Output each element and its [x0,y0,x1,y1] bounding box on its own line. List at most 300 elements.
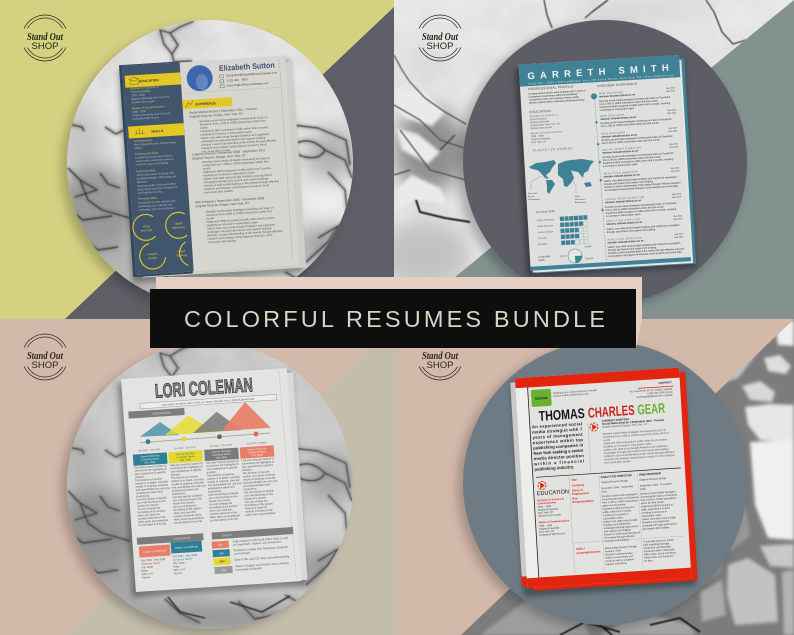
resume: Garreth Smith: Gather user data using Google Analytics and implement campaigns [608,242,681,249]
analytics director column: Excellent communication [605,552,634,557]
resume: Garreth Smith: ORIGINAL RESUME DESIGN, NY, NY [602,150,639,155]
resume: Elizabeth Sutton [118,55,307,283]
column text: results of ongoing, concrete [207,478,240,484]
sidebar: Brand [177,249,186,253]
analytics director column: ANALYTICS DIRECTOR [601,473,632,479]
resume: Garreth Smith: from 1,000 to 10000 subscribers within the first month. [599,99,658,106]
web designer column: WEB DESIGNER [639,471,661,477]
back sheet [127,373,307,591]
resume: Garreth Smith: ORIGINAL RESUME DESIGN, NY, NY [605,199,642,204]
logo: Stand Out Shop: Stand Out [422,350,459,362]
resume: Elizabeth Sutton: resulting an increase in subscription sales. [200,130,253,137]
resume: Elizabeth Sutton: Achieve a solid understanding of the market through effective [207,229,283,237]
resume: Garreth Smith: ORIGINAL RESUME DESIGN, NY, NY [601,134,638,139]
contact details: ElizabethS@OriginalResumeDesign.com [226,70,278,78]
column text: professional talent and [208,485,235,490]
current position text: CURRENT POSITION: [602,417,630,423]
tagline: position within publishing house. [553,393,589,398]
column text: Use your resume content to [170,461,203,467]
experience text: Original Resume Design, New York, NY [192,153,246,161]
resume: Garreth Smith: and analysis using keyword research, trend analysis and social data. [608,251,683,258]
experience entries: SOCIAL MEDIA DIRECTOR [602,146,642,152]
education text: New York, NY [538,511,554,515]
web designer column: CS5 including InDesign, [643,542,670,547]
job titles: Company Name [212,453,231,457]
analytics director column: Web Design Resume Design [605,545,638,550]
analytics director column: and organic link building. [604,529,632,533]
analytics director column: skills in social media and [605,555,634,560]
resume: Garreth Smith: ORIGINAL RESUME DESIGN, NY, NY [599,93,636,99]
photo [186,64,213,92]
logo: Stand Out Shop [24,334,66,380]
sidebar: Original University, New York, NY [132,111,171,117]
column text: when you need the [245,505,268,510]
job titles: Current Title Role [176,452,196,456]
education heading: EDUCATION [537,489,569,497]
resume: Garreth Smith: in increase in subscription sales. [603,163,639,168]
experience entries: WEB DESIGNER [600,114,624,118]
resume: Elizabeth Sutton: Gather user data using Google Analytics and organized [201,132,269,140]
column text: results of a certain. [244,495,267,501]
job titles: Company Name [141,457,160,462]
resume: Elizabeth Sutton: research and analysis using keyword research, trend [207,233,273,241]
column text: number and level of the [210,510,238,516]
column text: Use your resume content to [206,459,239,465]
row labels: Company [571,483,585,488]
resume: Elizabeth Sutton: month. [203,166,212,171]
left column text: An experienced social media strategist with 7 years of [528,89,586,96]
resume: Elizabeth Sutton: Gather user data using Google Analytics and organized [203,173,272,181]
sidebar: and CSS [141,228,153,233]
current position text: and social data studies. [604,459,632,465]
row labels: Dates of [572,488,583,493]
sidebar: Suite, Excel and Word, PowerPoint [137,185,178,191]
skills bar [212,527,293,539]
education text: Major [141,568,148,573]
column text: The function of resume [242,469,270,475]
resume: Garreth Smith: Mar 2017 [668,129,678,133]
web designer column: Gather user data using Google [642,516,677,521]
column text: experience. [172,491,186,496]
marble rocks [480,320,794,635]
language labels: English [585,246,593,248]
column text: The function of resume [207,472,235,478]
analytics director column: email as well as customer [606,558,634,563]
row labels: Responsibilities [572,499,594,504]
column text: professional talent and [136,489,163,495]
resume badge: RESUME [535,396,548,401]
left rule [516,388,538,578]
resume: Garreth Smith: Develop social media strategies increasing fan base on Facebook [605,202,677,209]
date labels: Jan 2002 - Jun 2008 [138,448,161,453]
column text: Use your resume content to [134,463,167,470]
column text: when you need the [173,510,196,515]
column text: The function of resume [171,474,199,480]
resume: Garreth Smith: ORIGINAL RESUME DESIGN, NY, NY [604,173,641,179]
analytics director column: subscription sales. [603,516,624,521]
resume: Garreth Smith: Sep 2014 [672,193,682,196]
education text: Bachelor of Science in [537,498,565,502]
contact box: 1234 SAINT, SUITE 09, NEW YORK, NY 10018 / 800 555 1234 / LORICOLEMAN.COM [161,398,254,407]
skill labels: Adobe Photoshop [537,218,555,222]
resume: Garreth Smith: Student Club Leader [530,126,553,130]
education text: New York, NY [539,530,555,534]
column text: skills, team accomplished [138,518,169,524]
column text: Use this section to details [172,493,203,499]
education text: 2003 - 2008 [538,505,552,509]
sidebar: Digital [174,221,183,226]
column text: You can change the [209,501,233,506]
sidebar: Strategy [176,253,188,257]
skill text: and InDesign [234,551,250,556]
education text: GPA: 3.47 [173,567,186,572]
column text: You can change the [244,498,268,504]
timeline [594,96,606,260]
back sheets [129,62,306,278]
analytics director column: from 1,000 to 10000 subscribers [602,499,639,505]
summary: An experienced social [532,421,582,429]
name: THOMAS [538,405,585,424]
skill labels: MS Office [538,244,549,246]
resume: Elizabeth Sutton: campaigns through paid search and organic building [207,226,272,234]
resume: Garreth Smith: from 1,000 to 10000 subscribers within the first month. [602,138,661,145]
web designer column: Photoshop and Illustrator [643,545,671,550]
contact block [629,380,674,399]
education text: Dec 2004 - Dec 2008 [172,553,198,558]
education text: 2008 - 2009 [539,524,553,528]
summary: experience within top [533,437,583,445]
resume: Elizabeth Sutton: Implement SEM increased in traffic within first 6 months [203,166,272,174]
resume: Garreth Smith: 2003 - 2008 [531,134,544,138]
name: Elizabeth Sutton [219,61,275,73]
resume: Elizabeth Sutton: Implement SEM increased in traffic within first 6 months [206,216,275,224]
column text: summarize the highlights of [206,462,239,468]
sidebar: Excellent communication skills in [135,153,173,160]
column text: summarize the highlights of [170,464,203,470]
resume: Lori Coleman [117,368,308,597]
column text: experience. [243,486,258,491]
light marble lumps [396,92,446,206]
sidebar: (2012) [134,146,142,150]
circle shadow [457,23,743,309]
column text: You can change the [137,506,161,511]
column text: your experience in specific [135,470,166,476]
analytics director column: Gather user data using Google [603,518,638,524]
logo: Stand Out Shop [419,15,461,61]
back sheets [521,372,698,591]
document shadow [118,60,304,283]
name: CHARLES [587,402,635,421]
sidebar [122,62,194,275]
name [538,400,665,424]
circle shadow [457,344,743,630]
column text: when you need the [209,507,232,513]
panel: pink marble quadrant [0,319,398,635]
banner black box [150,289,636,348]
left column text: management experience within top publishing [529,93,578,99]
resume: Garreth Smith: through paid search and organic link building. [607,228,656,234]
column text: skills, team accomplished [210,513,240,519]
column text: position. [171,472,181,477]
resume: Garreth Smith: Sep 2014 [669,143,679,146]
column text: formatting of the section [209,504,238,510]
column text: your role focusing on the [137,499,166,505]
date labels: Jan 2012 - Dec 2015 [210,443,233,448]
column text: and quantifiable you use your [208,481,242,487]
resume: Elizabeth Sutton: month. [206,216,215,220]
resume: Elizabeth Sutton: Facebook from 1,000 to 10000 subscribers within first [200,119,266,127]
grey diagonal band [65,7,394,319]
experience text: Web Designer | September 2006 - November 2008 [195,196,265,204]
analytics director column [601,473,643,566]
language labels: Language [538,254,551,259]
sidebar: Bachelor of Science in [130,85,160,90]
skill text: Fluent in English and Russian with a working [235,561,289,568]
current position text: Achieve a solid understanding of the market through effective [604,450,675,458]
resume: Garreth Smith: Sep 2014 [667,109,677,112]
resume: Elizabeth Sutton: research and analysis using keyword research, trend [201,142,267,150]
title banner [150,277,642,348]
column text: experience. [136,493,150,498]
yellow background [0,0,394,319]
analytics director column: November 2008 - September [601,485,634,490]
job titles: Company Name [248,450,267,454]
experience entries: ANALYTICS DIRECTOR [607,237,642,242]
resume: Garreth Smith: Achieve a solid understanding of the market through effective research [608,247,685,255]
language pie [568,249,582,263]
sidebar: including InDesign, Photoshop and [136,174,177,180]
row labels: Accomplishments [576,549,601,555]
resume: Lori Coleman: Skill [218,544,223,547]
sidebar: Master of Communication [132,104,165,110]
map callouts: Boston [528,195,536,198]
column text: section is to detail, concrete [207,475,240,481]
resume: Elizabeth Sutton: Achieve a solid understanding of the market through effective [204,179,280,188]
sidebar: Communication [131,89,151,94]
current position text: campaigns through paid search and organic link building. [604,447,669,455]
language labels: Spanish [585,258,594,260]
resume: Garreth Smith: Achieve a solid understanding of the market through effective research [604,181,681,189]
resume: Elizabeth Sutton: resulting an increase in subscription sales. [203,170,256,178]
column text: your role focusing on the [208,494,238,500]
analytics director column: traffic within first 6 months [603,509,632,514]
education text: Communication [537,501,557,505]
column text: number and level of the [138,515,166,521]
contact block: (123) 123-1234 | phone [647,391,673,395]
web designer column: traffic within first 6 months [641,507,671,512]
resume: Elizabeth Sutton: and social data studies. [201,148,231,154]
resume: Elizabeth Sutton: Achieve a solid understanding of the market through effective [201,138,277,147]
marble circle [67,20,353,293]
skill labels: Adobe InDesign [537,230,554,234]
map callouts: Amsterdam [575,201,586,204]
resume: Garreth Smith: Sep 2014 [666,87,676,90]
icon: play target [590,423,598,431]
resume: Lori Coleman: EXPERIENCE [152,410,171,416]
resume: Elizabeth Sutton: Develop social media strategies increasing fan base on [199,115,268,123]
web designer column: subscription sales. [642,514,663,518]
resume: Garreth Smith: Implement SEM increased in traffic within first 6 months, resulting [606,208,677,215]
logo: Stand Out Shop: SHOP [427,41,453,52]
resume: Garreth Smith: in increase in subscription sales. [600,107,635,112]
column text: can be listed to this role. [174,519,203,525]
world map [529,159,594,194]
sidebar: marketing, voice and customers [139,206,176,212]
resume: Garreth Smith: in increase in subscription sales. [606,213,641,218]
sidebar: HTML [143,224,151,229]
circle shadow [56,21,316,302]
education text: Master of Communication [538,519,570,524]
left column text: companies in New York seeking a senior media [529,96,580,102]
resume: Garreth Smith: ORIGINAL RESUME DESIGN, NY, NY [606,221,643,226]
resume: Lori Coleman: Degree or Certificate [175,545,199,550]
web designer column: Original Resume Design [639,477,667,482]
resume: Garreth Smith: Mar 2017 [675,235,684,239]
job boxes [133,452,168,466]
column text: section is to detail, concrete [243,472,276,478]
header band [519,55,680,87]
back sheets [524,58,696,273]
sidebar: Illustrator [137,179,148,184]
page [121,368,302,592]
column text: position. [135,474,145,479]
analytics director column: Achieve a solid understanding of [604,531,641,537]
analytics director column: the market through effective [604,535,636,540]
web designer column: for Mac [644,559,653,563]
sidebar: Technical Skills [136,168,156,174]
education text: Honors [174,571,183,575]
resume: Elizabeth Sutton: EXPERIENCE [195,101,216,106]
document shadow [511,371,696,597]
date labels: Jul 2010 - Jan 2012 [174,446,196,450]
skill text: knowledge of Spanish [235,566,262,572]
column text: section is to detail, concrete [135,479,168,486]
marble corner [380,0,794,319]
column text: results of ongoing, concrete [171,480,204,486]
left column text: director position within a financial publishing industry [529,98,585,105]
web designer column: PowerPoint, and Publisher [644,555,674,560]
language labels: Skills [538,258,545,262]
map callouts: Milan [575,196,581,198]
web designer column: Develop social media strategies [640,490,676,496]
current position text: Original Resume Design, New York, NY [602,422,648,429]
sidebar: Design [148,256,157,260]
resume: Garreth Smith: Master of Communication [531,130,563,135]
resume: Elizabeth Sutton: research and analysis using keyword research, trend [204,183,270,191]
analytics director column: Develop social media strategies [602,493,638,498]
education text: Original University [539,526,560,531]
summary: publishing companies in [533,442,584,451]
column text: professional talent and [172,487,199,493]
current position text: Gather user data using Google Analytics and implement [603,444,668,452]
experience text: Analytics Director | November 2008 - September 2011 [192,148,266,157]
row labels: Title [571,478,577,482]
banner pink backing [156,277,642,348]
panel: pink and slate circle quadrant [394,319,794,635]
page [515,368,691,588]
experience text: Social Media Director | September 2011 - Present [189,107,257,115]
map callouts: Philadelphia [528,199,541,201]
analytics director column: increasing fan base on Facebook [602,496,640,501]
skill text: Write HTML and CSS daily and understanding [234,554,290,562]
title: COLORFUL RESUMES BUNDLE [184,306,605,332]
resume: Lori Coleman: Skill [219,552,224,555]
left column headings: EDUCATION [529,109,551,114]
analytics director column: within the first month. [602,503,626,508]
column text: formatting of the section [245,501,273,507]
sidebar: EDUCATION [139,78,159,83]
web designer column: Office Suite, Excel and Word, [644,551,677,556]
experience entries: SOCIAL MEDIA DIRECTOR [605,196,645,201]
skill text: as PowerPoint, Outlook, and SharePoint [233,540,281,547]
resume: Garreth Smith: Sep 2014 [674,233,684,236]
education text: Honors [142,575,151,580]
summary: media director position [534,453,584,461]
resume badge [531,389,552,407]
column text: your experience in specific [242,463,274,469]
column text: section is to detail, concrete [171,477,204,483]
web designer column: campaigns through paid search [642,522,678,528]
panel: yellow marble quadrant [0,0,394,320]
name: GEAR [637,400,665,417]
web designer column: increasing fan base on Facebook [640,493,678,499]
experience heading: ENGINEER EXPERIENCE [597,82,637,88]
language labels: French [560,254,568,258]
contact block: thomasgear@gmail.com | website [637,394,673,399]
resume: Garreth Smith: Develop social media strategies increasing fan base on Facebook [602,152,674,159]
web designer column: September 2006 - November [640,483,672,488]
column text: skills, team accomplished [245,511,276,517]
column text: Use this section to details [244,488,275,494]
column text: experience. [208,489,222,494]
education text: Original University [538,507,559,512]
sidebar: Student Club Leader [131,99,155,104]
summary: within a financial [533,458,584,467]
skill text: Fully proficient in Microsoft Office Suite as well [232,536,288,543]
column text: can be listed to this role. [138,521,167,527]
experience text: Original Resume Design, New York, NY [195,201,249,208]
column text: and quantifiable you use your [243,479,278,485]
resume: Elizabeth Sutton: Implement SEM increased in traffic within first 6 months [200,125,269,133]
contact block: CONTACT [658,380,672,385]
column text: your experience in specific [170,467,202,474]
analytics director column: Original Resume Design [601,479,629,484]
logo: Stand Out Shop [419,350,461,380]
resume: Garreth Smith: Develop social media strategies increasing fan base on Facebook [600,118,672,125]
resume: Garreth Smith: Gather user data using Google Analytics and implement campaigns [607,224,680,231]
sidebar: Marketing [172,225,185,230]
analytics director column: research and analysis. [604,538,630,543]
row labels: Employment [572,491,589,496]
education text: City, State [141,565,154,569]
column text: Use this section to details [136,496,167,502]
red bands [515,368,680,388]
resume: Garreth Smith: and analysis using keyword research, trend analysis and social data. [604,185,679,192]
document shadow [117,372,306,597]
sidebar: customer support and timing [135,161,169,167]
resume: Garreth Smith: Develop social media strategies increasing fan base on Facebook [599,96,671,103]
resume: Lori Coleman: Degree or Certificate [143,549,167,554]
left column headings: PROFESSIONAL PROFILE [528,84,574,91]
sidebar: and Publisher for Mac [137,189,163,195]
sidebar: Advanced skills in Microsoft Office [137,182,177,188]
sidebar: 2008 - 2009 [132,109,146,114]
column text: formatting of the section [173,506,202,512]
job titles: Company Name [177,455,195,459]
resume: Elizabeth Sutton: campaigns through paid search and organic building [204,176,269,184]
education text: GPA: 3.47 [142,571,154,576]
column text: your experience in specific [206,465,238,471]
